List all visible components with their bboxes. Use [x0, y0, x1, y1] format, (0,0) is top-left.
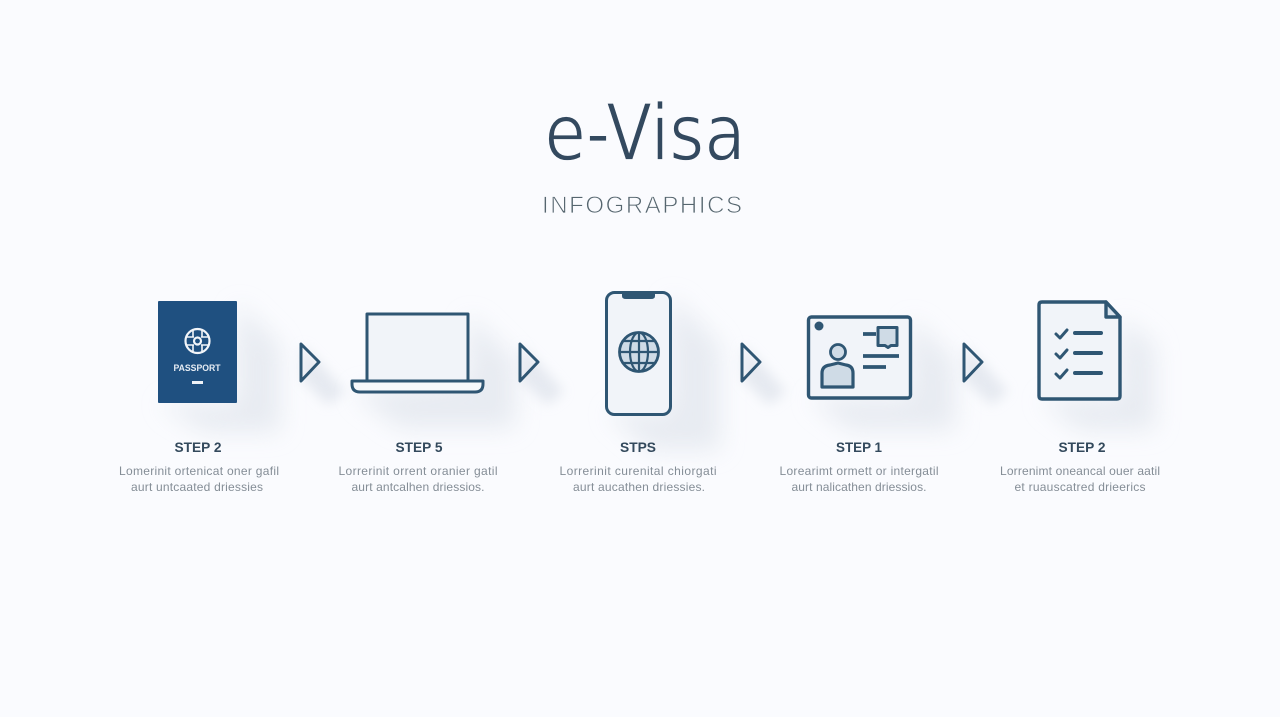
icon: phone with globe: [606, 292, 670, 414]
label: step 5: STEP 5: [396, 439, 443, 455]
step: id card: [780, 317, 955, 494]
icon: passport: [158, 301, 237, 403]
description: et ruauscatred drieerics: [1014, 480, 1146, 494]
description: Lorrerinit curenital chiorgati: [560, 464, 716, 478]
step: phone: [560, 292, 720, 494]
description: Lomerinit ortenicat oner gafil: [119, 464, 279, 478]
description: aurt nalicathen driessios.: [792, 480, 926, 494]
arrow 4: [964, 344, 1008, 405]
description: [1000, 464, 1160, 494]
arrow 2: [520, 344, 564, 405]
step: laptop: [338, 314, 515, 494]
label: step 2: STEP 2: [1058, 439, 1106, 455]
icon: passport: PASSPORT: [174, 363, 221, 373]
description: aurt antcalhen driessios.: [352, 480, 484, 494]
step: passport: [119, 301, 280, 494]
title: e-Visa: [544, 89, 746, 179]
icon: id card: [808, 317, 910, 398]
description: Lorrerinit orrent oranier gatil: [338, 464, 498, 478]
description: aurt aucathen driessies.: [573, 480, 705, 494]
step: checklist document: [1000, 302, 1160, 494]
description: Lorrenimt oneancal ouer aatil: [1000, 464, 1160, 478]
description: [560, 464, 716, 494]
description: [780, 464, 938, 494]
icon: laptop: [352, 314, 483, 392]
arrow 3: [742, 344, 786, 405]
icon: checklist document: [1039, 302, 1120, 399]
label: step 1: STEP 1: [836, 439, 882, 455]
label: step 2: STEP 2: [174, 439, 222, 455]
subtitle: INFOGRAPHICS: [542, 192, 742, 219]
description: Lorearimt ormett or intergatil: [780, 464, 938, 478]
description: [338, 464, 498, 494]
description: [119, 464, 279, 494]
description: aurt untcaated driessies: [131, 480, 263, 494]
arrow 1: [301, 344, 345, 405]
label: steps: STPS: [620, 439, 656, 455]
